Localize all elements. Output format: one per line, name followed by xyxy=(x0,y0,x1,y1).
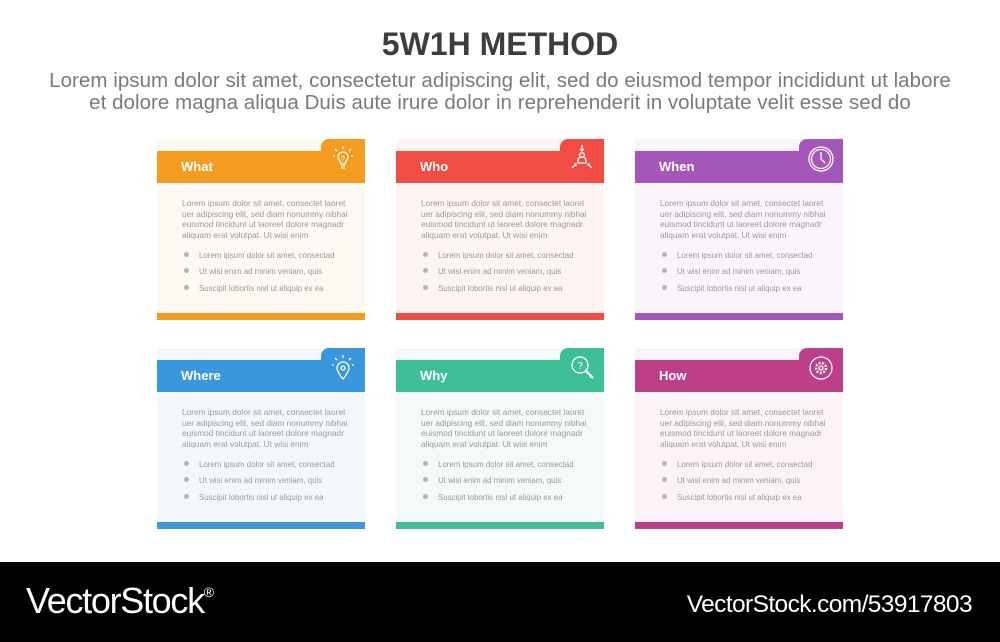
header: what xyxy=(157,151,365,183)
text: when: aliquam erat volutpat. Ut wisi enim xyxy=(660,230,786,240)
panel: who: Suscipit lobortis nisl ut aliquip ex ea xyxy=(438,284,563,293)
text: why: Lorem ipsum dolor sit amet, consectet laoret xyxy=(421,407,584,417)
text: who: aliquam erat volutpat. Ut wisi enim xyxy=(421,230,547,240)
text: why: aliquam erat volutpat. Ut wisi enim xyxy=(421,438,547,448)
header: why: Why xyxy=(420,368,447,383)
text: why: uer adipiscing elit, sed diam nonummy nibhai xyxy=(421,418,587,428)
text: what: Lorem ipsum dolor sit amet, consectet laoret xyxy=(182,198,345,208)
panel: where xyxy=(157,348,365,529)
header: where: Where xyxy=(181,368,221,383)
text: where: euismod tincidunt ut laoreet dolore magnadr xyxy=(182,428,344,438)
panel: how: Lorem ipsum dolor sit amet, consectad xyxy=(677,460,813,469)
icon: magnifier question: ? xyxy=(577,361,583,372)
panel: how: Ut wisi enim ad minim veniam, quis xyxy=(677,476,800,485)
header: who xyxy=(396,151,604,183)
panel: where: Suscipit lobortis nisl ut aliquip ex ea xyxy=(199,493,324,502)
text: who: euismod tincidunt ut laoreet dolore magnadr xyxy=(421,219,583,229)
footer: brand: VectorStock® xyxy=(26,580,213,621)
text: where: aliquam erat volutpat. Ut wisi enim xyxy=(182,438,308,448)
panel: when: Lorem ipsum dolor sit amet, consectad xyxy=(677,251,813,260)
text: where: Lorem ipsum dolor sit amet, consectet laoret xyxy=(182,407,345,417)
panel: where: Lorem ipsum dolor sit amet, consectad xyxy=(199,460,335,469)
panel: how: Suscipit lobortis nisl ut aliquip ex ea xyxy=(677,493,802,502)
text: what: euismod tincidunt ut laoreet dolore magnadr xyxy=(182,219,344,229)
panel: what: Lorem ipsum dolor sit amet, consectad xyxy=(199,251,335,260)
text: when xyxy=(660,198,826,240)
text: how xyxy=(660,407,826,448)
text: who: Lorem ipsum dolor sit amet, consectet laoret xyxy=(421,198,584,208)
icon: location pin xyxy=(332,355,354,380)
subtitle: et dolore magna aliqua Duis aute irure dolor in reprehenderit in voluptate velit esse sed do xyxy=(89,91,911,114)
text: how: Lorem ipsum dolor sit amet, consectet laoret xyxy=(660,407,823,417)
panel: why: Suscipit lobortis nisl ut aliquip ex ea xyxy=(438,493,563,502)
panel: who: Lorem ipsum dolor sit amet, consectad xyxy=(438,251,574,260)
text: how: uer adipiscing elit, sed diam nonummy nibhai xyxy=(660,418,826,428)
text: why: euismod tincidunt ut laoreet dolore magnadr xyxy=(421,428,583,438)
header: how xyxy=(635,360,843,392)
icon: gear cycle xyxy=(809,356,833,380)
text: where xyxy=(182,407,348,448)
header: how: How xyxy=(659,368,686,383)
header: who: Who xyxy=(420,159,448,174)
panel: what: Suscipit lobortis nisl ut aliquip ex ea xyxy=(199,284,324,293)
icon: lightbulb xyxy=(333,146,353,169)
text: what: uer adipiscing elit, sed diam nonummy nibhai xyxy=(182,208,348,218)
header: when: When xyxy=(659,159,694,174)
title: 5W1H METHOD xyxy=(382,26,618,62)
text: what xyxy=(182,198,348,240)
panel: when: Ut wisi enim ad minim veniam, quis xyxy=(677,267,800,276)
panel: why: Ut wisi enim ad minim veniam, quis xyxy=(438,476,561,485)
footer: url: VectorStock.com/53917803 xyxy=(687,591,972,618)
panel: how xyxy=(635,348,843,529)
text: what: aliquam erat volutpat. Ut wisi enim xyxy=(182,230,308,240)
text: who xyxy=(421,198,587,240)
icon: lightbulb: ? xyxy=(341,156,345,163)
panel: when xyxy=(635,139,843,320)
header: why xyxy=(396,360,604,392)
panel: what xyxy=(157,139,365,320)
panel: why xyxy=(396,348,604,529)
panel: what: Ut wisi enim ad minim veniam, quis xyxy=(199,267,322,276)
icon: magnifier question xyxy=(571,356,594,379)
panel: where: Ut wisi enim ad minim veniam, quis xyxy=(199,476,322,485)
text: when: Lorem ipsum dolor sit amet, consectet laoret xyxy=(660,198,823,208)
panel: when: Suscipit lobortis nisl ut aliquip ex ea xyxy=(677,284,802,293)
text: how: aliquam erat volutpat. Ut wisi enim xyxy=(660,438,786,448)
panel: who: Ut wisi enim ad minim veniam, quis xyxy=(438,267,561,276)
text: where: uer adipiscing elit, sed diam nonummy nibhai xyxy=(182,418,348,428)
footer xyxy=(0,562,1000,642)
text: who: uer adipiscing elit, sed diam nonummy nibhai xyxy=(421,208,587,218)
icon: clock xyxy=(808,146,834,172)
header: where xyxy=(157,360,365,392)
panel: who xyxy=(396,139,604,320)
subtitle xyxy=(49,69,951,114)
header: what: What xyxy=(181,159,213,174)
subtitle: Lorem ipsum dolor sit amet, consectetur adipiscing elit, sed do eiusmod tempor incididunt ut labore xyxy=(49,69,951,92)
text: how: euismod tincidunt ut laoreet dolore magnadr xyxy=(660,428,822,438)
header: when xyxy=(635,151,843,183)
icon: person xyxy=(572,145,592,168)
text: when: euismod tincidunt ut laoreet dolore magnadr xyxy=(660,219,822,229)
text: when: uer adipiscing elit, sed diam nonummy nibhai xyxy=(660,208,826,218)
text: why xyxy=(421,407,587,448)
panel: why: Lorem ipsum dolor sit amet, consectad xyxy=(438,460,574,469)
